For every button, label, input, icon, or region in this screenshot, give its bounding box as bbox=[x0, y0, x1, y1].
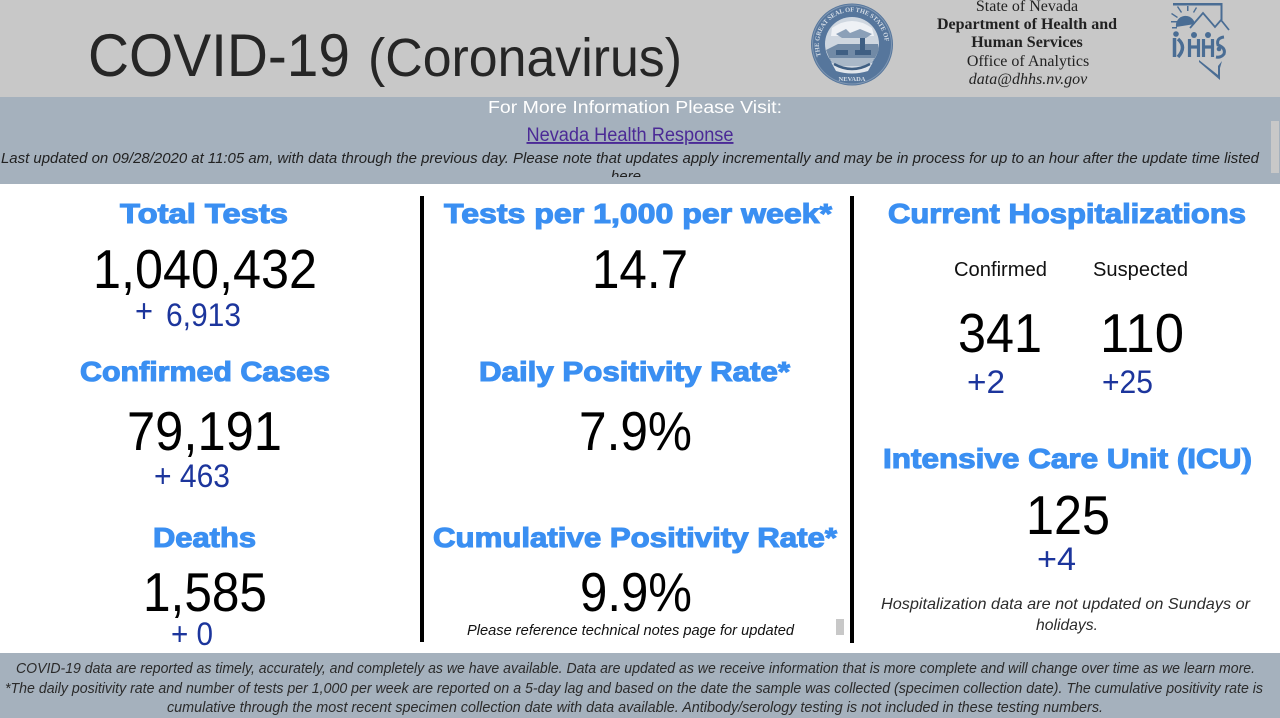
panel: rates column bbox=[433, 198, 844, 639]
daily positivity value: 7.9% bbox=[579, 400, 692, 462]
heading: total tests: Total Tests bbox=[120, 198, 288, 229]
title bbox=[88, 22, 682, 89]
letter H figure bbox=[1205, 32, 1211, 38]
suspected change: +25 bbox=[1102, 364, 1153, 400]
visit text: For More Information Please Visit: bbox=[488, 97, 782, 117]
total tests change bbox=[135, 293, 241, 333]
confirmed change: +2 bbox=[967, 364, 1005, 400]
letter D bbox=[1173, 31, 1179, 37]
suspected label: Suspected bbox=[1093, 259, 1188, 281]
heading: ICU: Intensive Care Unit (ICU) bbox=[883, 443, 1252, 474]
footer notes: cumulative through the most recent specimen collection date with data available. Antibody/serology testing is not included in these testing numbers. bbox=[167, 699, 1103, 716]
column divider right bbox=[850, 196, 854, 643]
total tests change: 6,913 bbox=[166, 297, 241, 333]
title: (Coronavirus) bbox=[368, 28, 682, 88]
heading: confirmed cases: Confirmed Cases bbox=[80, 356, 330, 387]
agency text block: data@dhhs.nv.gov bbox=[969, 71, 1088, 88]
hospitalization note bbox=[881, 596, 1251, 634]
hospitalization note: holidays. bbox=[1036, 617, 1098, 634]
info band bbox=[0, 97, 1280, 185]
letter S figure bbox=[1216, 37, 1224, 57]
panel: totals column bbox=[80, 198, 330, 652]
heading: tests per 1,000: Tests per 1,000 per week* bbox=[444, 198, 832, 229]
technical notes: Please reference technical notes page for updated bbox=[467, 622, 795, 639]
agency text block: Human Services bbox=[971, 34, 1083, 51]
heading: deaths: Deaths bbox=[153, 522, 256, 553]
icon: Nevada state seal: THE GREAT SEAL OF THE STATE OF bbox=[814, 7, 890, 58]
hospitalization note: Hospitalization data are not updated on Sundays or bbox=[881, 596, 1251, 613]
icon: DHHS logo bbox=[1171, 3, 1229, 80]
heading: daily positivity: Daily Positivity Rate* bbox=[479, 356, 790, 387]
panel: hospital column bbox=[881, 198, 1252, 634]
deaths value: 1,585 bbox=[143, 561, 267, 623]
heading: cumulative positivity: Cumulative Positivity Rate* bbox=[433, 522, 837, 553]
agency text block: Office of Analytics bbox=[967, 53, 1089, 70]
icon: Nevada state seal: NEVADA bbox=[839, 76, 866, 83]
tests per 1,000 value: 14.7 bbox=[592, 238, 688, 300]
title: COVID-19 bbox=[88, 22, 350, 89]
deaths change: + 0 bbox=[171, 616, 213, 652]
footer notes bbox=[5, 660, 1263, 716]
total tests value: 1,040,432 bbox=[93, 238, 317, 300]
scrollbar bbox=[836, 619, 844, 635]
agency text block bbox=[937, 0, 1117, 88]
cumulative positivity value: 9.9% bbox=[580, 561, 692, 623]
letter H figure bbox=[1191, 32, 1197, 38]
suspected value: 110 bbox=[1100, 302, 1184, 364]
ICU value: 125 bbox=[1026, 484, 1110, 546]
column divider left bbox=[420, 196, 424, 642]
scrollbar bbox=[1271, 121, 1279, 173]
confirmed cases value: 79,191 bbox=[127, 400, 282, 462]
heading: current hospitalizations: Current Hospitalizations bbox=[888, 198, 1246, 229]
header band bbox=[0, 0, 1280, 97]
total tests change: + bbox=[135, 293, 153, 329]
icon: Nevada state seal bbox=[811, 4, 893, 86]
link: Nevada Health Response bbox=[526, 125, 734, 146]
confirmed cases change: + 463 bbox=[154, 458, 230, 494]
last updated note: Last updated on 09/28/2020 at 11:05 am, with data through the previous day. Please note that updates apply incrementally and may be in process for up to an hour after the update time listed bbox=[1, 150, 1260, 167]
clipped text: here. bbox=[611, 168, 645, 185]
ICU change: +4 bbox=[1037, 541, 1076, 577]
footer band bbox=[0, 653, 1280, 718]
confirmed value: 341 bbox=[958, 302, 1042, 364]
agency text block: Department of Health and bbox=[937, 16, 1117, 33]
confirmed label: Confirmed bbox=[954, 259, 1047, 281]
